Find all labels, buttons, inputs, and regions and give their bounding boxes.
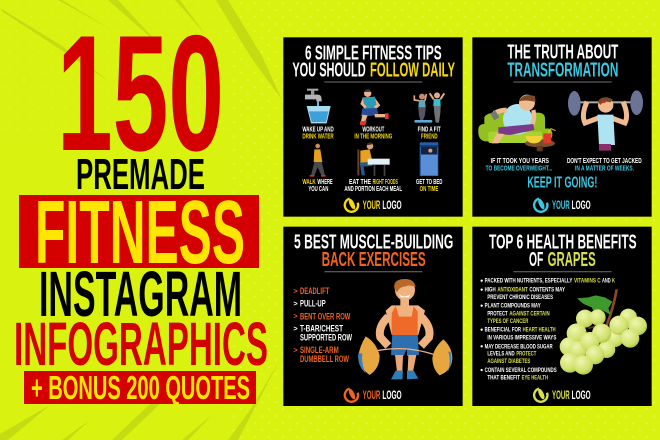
logo: LOGO [382, 199, 402, 212]
benefits list: CONTENTS MAY [529, 287, 565, 294]
panel title: BACK EXERCISES [322, 248, 426, 271]
exercise list: BENT OVER ROW [300, 311, 351, 321]
captions [486, 158, 642, 172]
logo [534, 388, 591, 402]
logo: YOUR [552, 199, 570, 212]
panel title [489, 230, 637, 271]
benefits list: THAT BENEFIT [487, 374, 520, 381]
exercise list: DUMBBELL ROW [300, 354, 349, 364]
captions: FIND A FIT [418, 127, 441, 134]
exercise list: > [293, 312, 298, 321]
captions: IN A MATTER OF WEEKS. [575, 165, 634, 172]
panel: health benefits of grapes [472, 227, 652, 406]
logo: YOUR [552, 389, 570, 402]
captions: WAKE UP AND [302, 127, 334, 134]
benefits list: PROTECT [516, 351, 536, 358]
captions: DRINK WATER [302, 134, 334, 141]
icon: walking person [310, 144, 326, 177]
panel: 6 simple fitness tips [283, 37, 463, 217]
benefits list: HEART HEALTH [523, 327, 556, 334]
panel title: FOLLOW DAILY [370, 59, 455, 82]
exercise list: > [293, 299, 298, 308]
panel title [294, 230, 453, 271]
captions [302, 127, 442, 193]
benefits list: AND [602, 278, 611, 285]
logo: LOGO [572, 389, 591, 402]
logo [345, 198, 402, 212]
captions: RIGHT FOODS [373, 179, 398, 186]
heading: infographics: INFOGRAPHICS [14, 310, 268, 378]
captions: GET TO BED [416, 179, 442, 186]
exercise list: PULL-UP [300, 299, 326, 309]
callout: keep it going: KEEP IT GOING! [527, 174, 597, 191]
logo: YOUR [363, 199, 381, 212]
benefits list [480, 278, 615, 381]
exercise list: > [293, 324, 298, 333]
benefits list: VITAMINS C [574, 278, 601, 285]
logo [534, 198, 591, 212]
panel: the truth about transformation [472, 37, 652, 217]
benefits list: PROTECT [487, 311, 508, 318]
benefits list: K [612, 278, 615, 285]
captions: WALK [302, 179, 316, 186]
illustration: man on couch [478, 95, 556, 151]
exercise list [293, 286, 352, 364]
banner: bonus quotes [24, 369, 256, 406]
captions: YOU CAN [308, 186, 328, 193]
exercise list: T-BAR/CHEST [300, 324, 343, 334]
logo [345, 388, 402, 402]
logo: LOGO [572, 199, 591, 212]
captions: WORKOUT [362, 127, 385, 134]
captions: EAT THE [349, 179, 371, 186]
panel: back exercises [283, 227, 463, 406]
panel title: OF [529, 248, 543, 271]
captions: AND PORTION EACH MEAL [344, 186, 402, 193]
captions: ON TIME [420, 186, 439, 193]
panel title: YOU SHOULD [292, 59, 366, 82]
heading: instagram: INSTAGRAM [39, 258, 242, 330]
icon: bed [420, 142, 438, 176]
benefits list: LEVELS AND [487, 351, 515, 358]
logo: LOGO [382, 389, 402, 402]
benefits list: PACKED WITH NUTRIENTS, ESPECIALLY [485, 278, 573, 285]
icon: fit friends [414, 92, 444, 123]
benefits list: TYPES OF CANCER [487, 318, 528, 325]
benefits list: BENEFICIAL FOR [485, 327, 521, 334]
exercise list: SINGLE-ARM [300, 345, 339, 355]
captions: TO BECOME OVERWEIGHT... [486, 165, 552, 172]
exercise list: > [293, 286, 298, 295]
panel title: GRAPES [548, 248, 596, 271]
icon: workout lunge [360, 90, 389, 125]
benefits list: IN VARIOUS IMPRESSIVE WAYS [487, 334, 557, 341]
exercise list: SUPPORTED ROW [300, 332, 352, 342]
benefits list: ANTIOXIDANT [497, 287, 528, 294]
benefits list: MAY DECREASE BLOOD SUGAR [485, 343, 553, 350]
captions: IF IT TOOK YOU YEARS [491, 158, 549, 165]
illustration: man deadlifting [358, 279, 452, 379]
panel title [507, 40, 619, 82]
logo: YOUR [363, 389, 381, 402]
benefits list: HIGH [485, 287, 496, 294]
exercise list: DEADLIFT [300, 286, 330, 296]
headline number: 150: 150 [57, 1, 224, 185]
benefits list: PLANT COMPOUNDS MAY [485, 303, 541, 310]
panel title: 5 BEST MUSCLE-BUILDING [294, 230, 453, 253]
icon: person eating at table [357, 142, 390, 176]
benefits list: AGAINST CERTAIN [509, 311, 550, 318]
benefits list: PREVENT CHRONIC DISEASES [487, 294, 553, 301]
illustration: grapes [560, 289, 647, 375]
banner: fitness: FITNESS [35, 183, 245, 283]
benefits list: CONTAIN SEVERAL COMPOUNDS [485, 367, 557, 374]
captions: FRIEND [421, 134, 438, 141]
panel title: 6 SIMPLE FITNESS TIPS [305, 41, 442, 64]
captions: IN THE MORNING [354, 134, 392, 141]
heading: premade: PREMADE [76, 150, 205, 199]
illustration: man lifting barbell [568, 90, 643, 151]
exercise list: > [293, 345, 298, 354]
banner: fitness [19, 183, 259, 283]
banner: bonus quotes: + BONUS 200 QUOTES [31, 369, 250, 406]
panel title [292, 41, 455, 82]
captions: WHERE [317, 179, 333, 186]
icon: faucet and bowl [305, 89, 331, 123]
benefits list: EYE HEALTH [522, 374, 548, 381]
benefits list: AGAINST DIABETES [487, 358, 531, 365]
